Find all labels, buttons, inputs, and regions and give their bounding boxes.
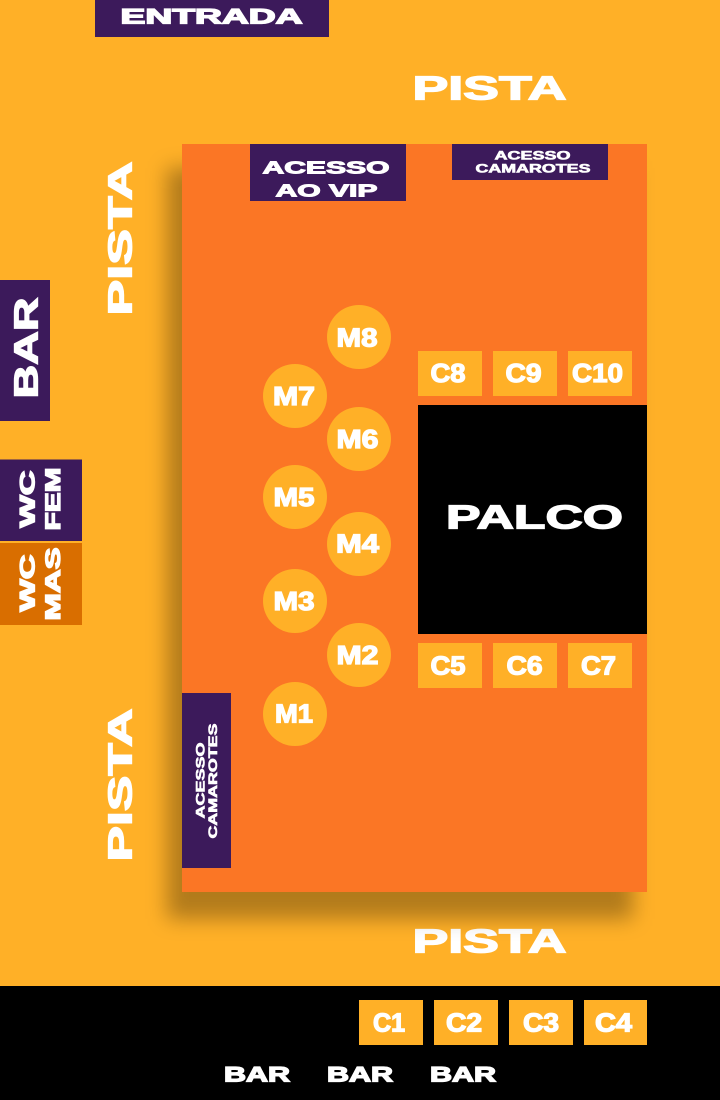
box c10	[568, 351, 632, 396]
acesso ao vip sign: ACESSO	[262, 158, 390, 178]
acesso camarotes sign left	[182, 693, 231, 868]
box c9	[493, 351, 557, 396]
box c10: C10	[572, 358, 623, 388]
table m2: M2	[336, 640, 378, 670]
entrada sign: ENTRADA	[120, 6, 302, 28]
box c1	[359, 1000, 423, 1045]
stage	[418, 405, 647, 634]
table m2	[327, 623, 391, 687]
wc fem sign: FEM	[42, 468, 65, 530]
box c3	[509, 1000, 573, 1045]
box c7: C7	[581, 650, 616, 680]
stage: PALCO	[446, 498, 623, 536]
box c2	[434, 1000, 498, 1045]
table m4	[327, 512, 391, 576]
box c5	[418, 643, 482, 688]
label: pista top: PISTA	[412, 70, 566, 106]
box c4	[584, 1000, 647, 1045]
label: pista bottom: PISTA	[412, 922, 566, 960]
bar label 1: BAR	[224, 1064, 290, 1086]
box c6: C6	[506, 650, 542, 680]
box c8	[418, 351, 482, 396]
table m3: M3	[274, 586, 314, 616]
entrada sign	[95, 0, 329, 37]
wc fem sign: WC	[16, 470, 40, 528]
acesso ao vip sign	[250, 144, 406, 201]
table m5	[263, 465, 327, 529]
acesso camarotes sign top	[452, 144, 608, 180]
bar label 2: BAR	[327, 1064, 393, 1086]
box c2: C2	[446, 1008, 482, 1038]
box c4: C4	[595, 1008, 633, 1038]
acesso ao vip sign: AO VIP	[276, 180, 378, 200]
box c7	[568, 643, 632, 688]
box c5: C5	[430, 650, 466, 680]
acesso camarotes sign top: CAMAROTES	[476, 164, 591, 176]
table m1	[263, 682, 327, 746]
table m6: M6	[336, 424, 378, 454]
wc fem sign	[0, 460, 82, 541]
table m8: M8	[336, 322, 378, 352]
table m5: M5	[274, 482, 314, 512]
box c9: C9	[506, 358, 542, 388]
label: pista left upper: PISTA	[102, 162, 138, 316]
table m4: M4	[336, 528, 380, 558]
box c6	[493, 643, 557, 688]
bar label 3: BAR	[430, 1064, 496, 1086]
table m7: M7	[273, 381, 315, 411]
acesso camarotes sign left: CAMAROTES	[208, 723, 220, 838]
table m6	[327, 407, 391, 471]
wc mas sign: WC	[16, 554, 40, 612]
box c8: C8	[430, 358, 466, 388]
box c1: C1	[373, 1008, 405, 1038]
wc mas sign: MAS	[42, 548, 65, 620]
bottom band	[0, 986, 720, 1100]
acesso camarotes sign left: ACESSO	[196, 742, 208, 818]
bar sign left	[0, 280, 50, 421]
bar sign left: BAR	[8, 297, 44, 398]
table m7	[263, 364, 327, 428]
table m3	[263, 569, 327, 633]
label: pista left lower: PISTA	[102, 708, 138, 862]
wc mas sign	[0, 543, 82, 625]
panel: venue floor	[182, 144, 647, 892]
acesso camarotes sign top: ACESSO	[494, 150, 571, 162]
box c3: C3	[523, 1008, 559, 1038]
table m1: M1	[275, 698, 313, 728]
panel shadow	[167, 168, 633, 919]
table m8	[327, 305, 391, 369]
